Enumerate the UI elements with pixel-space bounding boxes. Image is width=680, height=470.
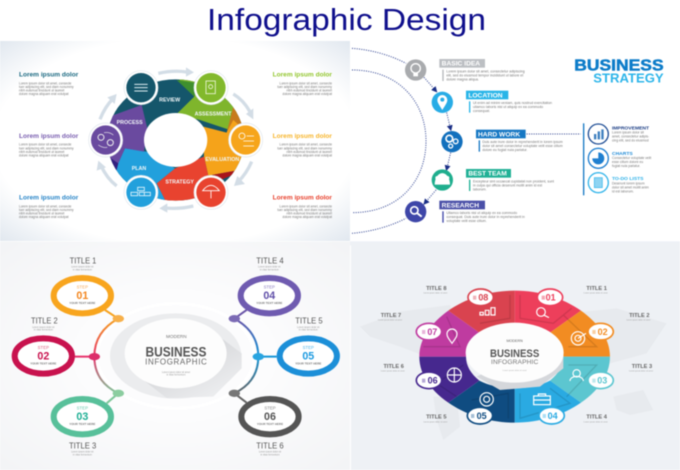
badge 03: 03 [597,376,607,386]
heading: business strategy: STRATEGY [593,72,664,86]
step 2: Lorem ipsum dolor sit [32,326,55,329]
center disc [466,323,564,390]
callouts left: Lorem ipsum dolor sit amet, consecte [19,204,72,208]
node: hard work: dolore eu fugiat nula pariatur. [482,148,528,152]
segments [419,291,610,423]
step 6: YOUR TEXT HERE [257,422,283,426]
step 5: TITLE 5 [295,317,323,326]
step 3: Lorem ipsum dolor sit [71,451,94,454]
segment labels: PROCESS [117,120,143,126]
step 5: 05 [302,350,314,362]
world map [360,305,667,440]
to-do lists: id est laborum. [612,189,634,193]
callouts right: tuer adipiscing elit, sed diam nonummy [277,208,332,212]
callouts left [19,73,79,219]
badge 07: 07 [427,327,437,337]
callouts left: nibh euismod tincidunt ut laoreet [19,150,65,154]
callouts right: nibh euismod tincidunt ut laoreet [287,212,332,216]
center disc [97,304,254,408]
improvement [588,124,649,144]
callouts right: tuer adipiscing elit, sed diam nonummy [277,146,332,150]
callouts left: Lorem ipsum dolor sit amet, consecte [19,81,72,85]
center disc: BUSINESS [490,348,540,360]
badge 01: 01 [546,293,556,303]
node: research: Ullamco laboris nisi ut aliquip ex ea commodo [446,211,517,215]
step 5: in vitae fermentum [299,329,318,332]
outer titles: Lorem ipsum dolor sit amet [584,291,608,294]
side list [583,123,651,195]
panel: circular process diagram [0,41,350,241]
badge 07 [416,323,442,340]
segment labels: PLAN [132,166,146,172]
node: research: consequat. Duis aute irure dolor in reprehenderit in [446,215,525,219]
node: hard work: HARD WORK [478,131,520,138]
outer titles: TITLE 3 [632,364,652,370]
callouts right: Lorem ipsum dolor [273,73,333,79]
panel: business strategy [350,40,680,245]
outer titles: Lorem ipsum dolor sit amet [378,318,402,321]
callouts right: nibh euismod tincidunt ut laoreet [287,150,332,154]
to-do lists: Deserunt lorem ipsum [612,181,645,185]
outer titles: TITLE 4 [586,415,608,421]
heading: business strategy: BUSINESS [574,58,664,75]
callouts left: tuer adipiscing elit, sed diam nonummy [19,208,74,212]
panel: eight step wheel [351,242,680,470]
callouts right: nibh euismod tincidunt ut laoreet [287,89,332,93]
step 1: in vitae fermentum [73,268,92,271]
step 5 [280,317,337,374]
badge 04: 04 [548,411,558,421]
charts: CHARTS [612,151,633,157]
outer titles: TITLE 5 [426,415,447,421]
callouts right: dolore magna aliquam erat volutpat [282,153,332,157]
dotted arcs [352,48,581,233]
outer titles: TITLE 1 [586,286,607,292]
node: hard work: dolor sit amet consectetur voluptate velit esse cillum [482,144,563,148]
step 3: 03 [76,411,88,423]
outer titles: TITLE 6 [383,364,404,370]
callouts right: dolore magna aliquam erat volutpat [282,215,332,219]
segment icons [447,308,586,406]
to-do lists: TO-DO LISTS [612,176,644,182]
charts: esse cillum dolore eu [612,160,643,164]
badge 01 [537,289,563,306]
node: hard work: Duis aute irure dolor in reprehenderit in lorem ipsum [482,140,563,144]
callouts right: Lorem ipsum dolor [273,196,333,202]
step 5: Lorem ipsum dolor sit [297,326,320,329]
callouts left: dolore magna aliquam erat volutpat [19,92,69,96]
outer titles: Lorem ipsum dolor sit amet [629,369,653,372]
step 1: TITLE 1 [70,256,97,265]
charts [588,148,651,168]
center disc: Lorem ipsum dolor sit amet [503,369,527,372]
center disc: BUSINESS [145,345,206,360]
node: location: ullamco laboris nisi ut aliquip ex ea commodo [473,105,543,109]
step 4: STEP [264,285,275,290]
node: basic idea: dolore magna aliqua. [446,77,479,81]
step 4 [241,256,298,313]
step 1: 01 [76,290,88,302]
icon: strategy [194,175,228,209]
outer titles: Lorem ipsum dolor sit amet [381,369,405,372]
node: basic idea: Lorem ipsum dolor sit amet, consectetur adipiscing [446,69,525,73]
callouts left: Lorem ipsum dolor sit amet, consecte [19,143,72,147]
badge 02: 02 [598,327,608,337]
step 4: Lorem ipsum dolor sit [258,266,281,269]
step 6: in vitae fermentum [260,453,280,456]
center disc: MODERN [507,339,523,343]
icon: plan [124,175,158,209]
step 6 [241,399,299,456]
node: research: voluptate velit esse cillum. [446,219,487,223]
icon: evaluation [229,123,263,157]
ring segments [109,78,242,202]
segment labels: STRATEGY [165,180,194,186]
outer titles [378,286,653,423]
step 4: YOUR TEXT HERE [256,301,282,305]
node: best team: BEST TEAM [468,171,507,178]
node: location [432,91,552,113]
step 6: TITLE 6 [256,441,284,450]
badge 02 [588,323,613,340]
outer titles: Lorem ipsum dolor sit amet [584,420,608,423]
step 1: YOUR TEXT HERE [69,301,95,305]
outer titles: TITLE 8 [426,286,447,292]
callouts left: nibh euismod tincidunt ut laoreet [19,212,65,216]
callouts right: Lorem ipsum dolor sit amet, consecte [280,143,332,147]
center disc: Lorem ipsum dolor sit amet [162,371,190,374]
step 5: STEP [303,345,314,350]
step 6: 06 [264,411,276,423]
outer titles: TITLE 7 [381,313,401,319]
step 2: TITLE 2 [31,317,58,326]
callouts right: Lorem ipsum dolor sit amet, consecte [280,81,332,85]
charts: Consectetur voluptate velit [612,156,651,160]
improvement: amet, consectetur adipis- [612,135,649,139]
callouts right: dolore magna aliquam erat volutpat [282,92,332,96]
callouts left: Lorem ipsum dolor [19,73,79,79]
node: location: Ut enim ad minim veniam, quis nostrud exercitation [473,101,552,105]
heading: business strategy [574,58,664,86]
callouts left: dolore magna aliquam erat volutpat [19,215,69,219]
step 6: STEP [264,405,276,410]
step 2 [15,317,72,374]
callouts left: Lorem ipsum dolor [19,134,79,140]
step 2: YOUR TEXT HERE [30,361,56,365]
node: best team: Excepteur sint occaecat cupidatat non proident, sunt [473,179,554,183]
callouts left: tuer adipiscing elit, sed diam nonummy [19,146,74,150]
badge 08 [468,289,493,306]
callouts right [273,73,333,219]
improvement: cing elit, sed do eiusmod [612,139,649,143]
step 2: in vitae fermentum [34,329,53,332]
step 5: YOUR TEXT HERE [295,361,321,365]
step badges [416,289,613,424]
segment labels [117,98,239,186]
callouts right: Lorem ipsum dolor sit amet, consecte [280,204,332,208]
badge 05 [467,407,493,424]
node: location: consequat. [473,109,490,113]
node: research [405,201,525,223]
step 2: STEP [38,345,49,350]
to-do lists [588,173,649,193]
center disc: MODERN [166,334,187,339]
center hole [144,113,207,167]
step 3 [54,399,111,456]
step 4: in vitae fermentum [260,268,279,271]
to-do lists: dolor sit amet mollit anim [612,185,649,189]
icon: assessment [194,71,228,105]
step 4: 04 [263,290,275,302]
node: basic idea: BASIC IDEA [442,61,480,68]
outer titles: Lorem ipsum dolor sit amet [423,420,448,423]
improvement: Lorem ipsum dolor sit [612,131,644,135]
callouts right: tuer adipiscing elit, sed diam nonummy [277,85,332,89]
step 1: STEP [77,285,88,290]
center disc: INFOGRAPHIC [145,358,207,367]
step 3: in vitae fermentum [73,453,92,456]
connectors [75,310,277,403]
title: Infographic Design [207,2,486,37]
center disc: INFOGRAPHIC [491,359,539,366]
node: best team: laborum. [473,187,487,191]
node: research: RESEARCH [442,202,479,209]
node: location: LOCATION [468,92,503,99]
step 2: 02 [37,350,49,362]
segment labels: EVALUATION [205,157,239,163]
step 1: Lorem ipsum dolor sit [71,266,94,269]
cycle arrows [100,71,252,208]
outer titles: TITLE 2 [629,313,650,319]
node: basic idea [405,59,525,81]
badge 05: 05 [477,411,487,421]
node: best team [432,169,554,191]
step 3: STEP [77,405,88,410]
step 4: TITLE 4 [256,256,284,265]
icon: process [89,123,123,157]
outer titles: Lorem ipsum dolor sit amet [626,318,651,321]
step 1 [54,256,111,313]
icon: review [124,71,158,105]
charts: fugiat nula pariatur. [612,164,640,168]
callouts left: Lorem ipsum dolor [19,196,79,202]
callouts left: nibh euismod tincidunt ut laoreet [19,89,65,93]
step 6: Lorem ipsum dolor sit [259,451,281,454]
center disc: in vitae fermentum [166,374,186,377]
callouts left: tuer adipiscing elit, sed diam nonummy [19,85,74,89]
badge 03 [588,372,613,389]
step 3: TITLE 3 [69,441,97,450]
callouts right: Lorem ipsum dolor [273,134,333,140]
node: hard work [441,130,563,152]
improvement: IMPROVEMENT [612,126,649,132]
step 3: YOUR TEXT HERE [69,422,95,426]
segment labels: REVIEW [159,98,181,104]
node: best team: in culpa qui officia deserunt mollit anim id est [473,183,542,187]
badge 08: 08 [478,293,488,303]
badge 04 [539,407,564,424]
segment labels: ASSESSMENT [195,111,232,117]
node: basic idea: elit, sed do eiusmod tempor incididunt ut labore et [446,73,523,77]
badge 06: 06 [428,376,438,386]
outer titles: Lorem ipsum dolor sit amet [423,291,448,294]
callouts left: dolore magna aliquam erat volutpat [19,153,69,157]
badge 06 [416,372,442,389]
panel: modern business infographic steps [0,242,350,470]
